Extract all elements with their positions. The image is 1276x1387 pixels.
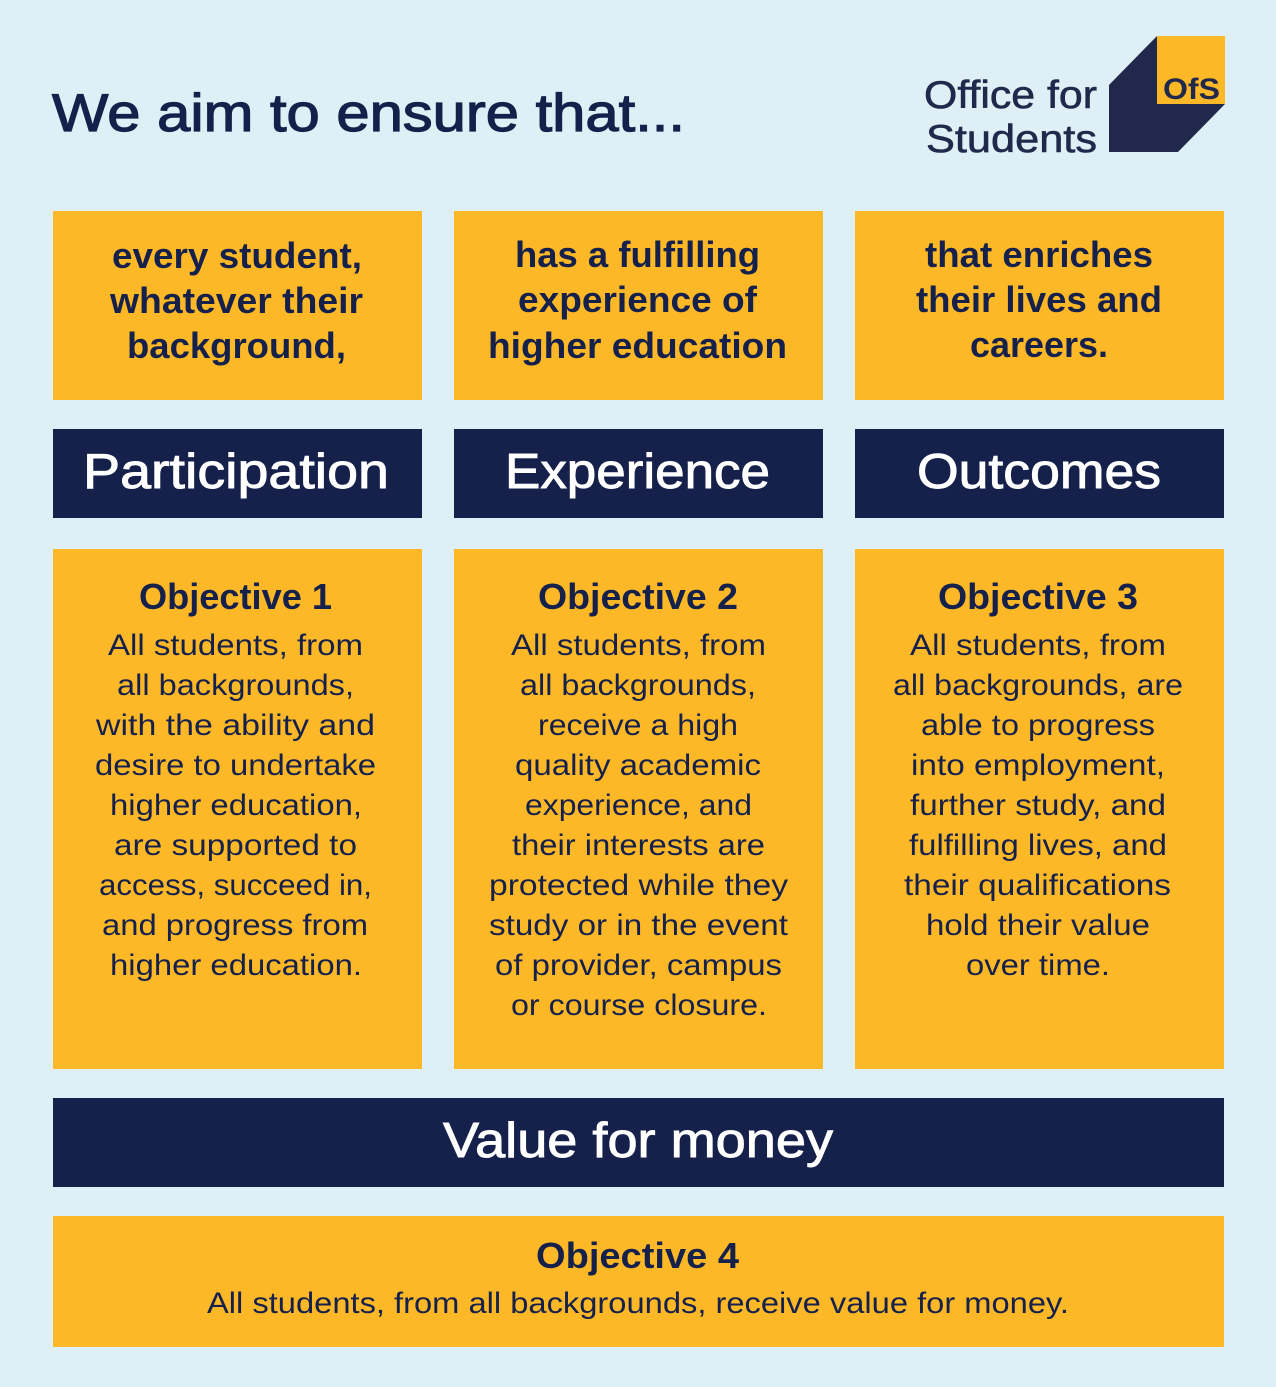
panel: fulfilling experience: experience of [518, 279, 758, 320]
Objective 2 text: all backgrounds, [520, 669, 756, 702]
Objective 3 heading: Objective 3 [938, 576, 1138, 617]
panel: every student: whatever their [109, 280, 363, 321]
panel: every student: background, [127, 325, 346, 366]
Objective 2 heading: Objective 2 [538, 576, 738, 617]
Objective 1 text: All students, from [108, 629, 363, 662]
Objective 2 text: receive a high [538, 709, 738, 742]
heading: Participation [53, 429, 422, 518]
panel: Objective 1 [53, 549, 422, 1069]
Objective 2 text: quality academic [515, 749, 761, 782]
Objective 1 text: desire to undertake [95, 749, 376, 782]
panel: enriches lives: careers. [970, 324, 1108, 365]
Objective 3 text: over time. [966, 949, 1110, 982]
panel: every student: every student, [112, 235, 362, 276]
logo wordmark: Office for [924, 74, 1097, 117]
Objective 1 text [95, 629, 376, 982]
Objective 1 text: higher education, [110, 789, 362, 822]
panel: every student [53, 211, 422, 400]
Objective 2 text: their interests are [512, 829, 765, 862]
Objective 3 text: hold their value [926, 909, 1150, 942]
Objective 3 text: able to progress [921, 709, 1155, 742]
panel: fulfilling experience [454, 211, 823, 400]
heading: Value for money [53, 1098, 1224, 1187]
logo icon: OfS [1163, 73, 1220, 106]
heading: Experience: Experience [505, 445, 770, 499]
panel: Objective 3 [855, 549, 1224, 1069]
Objective 1 text: all backgrounds, [117, 669, 354, 702]
panel: fulfilling experience: has a fulfilling [515, 234, 760, 275]
Objective 2 text: or course closure. [511, 989, 767, 1022]
Objective 2 text: All students, from [511, 629, 766, 662]
Objective 1 text: access, succeed in, [99, 869, 372, 902]
logo: Office for Students [924, 36, 1225, 161]
logo wordmark: Students [926, 118, 1097, 161]
Objective 1 text: with the ability and [95, 709, 375, 742]
Objective 1 heading: Objective 1 [139, 576, 332, 617]
heading: Participation: Participation [83, 445, 389, 499]
Objective 3 text: their qualifications [904, 869, 1171, 902]
Objective 3 text: fulfilling lives, and [909, 829, 1167, 862]
Objective 2 text: study or in the event [489, 909, 788, 942]
Objective 1 text: are supported to [114, 829, 357, 862]
heading: Outcomes: Outcomes [917, 445, 1161, 499]
Objective 3 text: All students, from [910, 629, 1166, 662]
heading: Outcomes [855, 429, 1224, 518]
heading: Experience [454, 429, 823, 518]
logo wordmark [924, 74, 1097, 161]
Objective 4 heading: Objective 4 [536, 1235, 739, 1276]
panel: enriches lives [855, 211, 1224, 400]
panel: enriches lives: their lives and [916, 279, 1162, 320]
Objective 1 text: and progress from [102, 909, 368, 942]
Objective 4 text: All students, from all backgrounds, receive value for money. [207, 1287, 1069, 1320]
Objective 3 text [893, 629, 1183, 982]
Objective 1 text: higher education. [110, 949, 362, 982]
Objective 2 text: of provider, campus [495, 949, 782, 982]
Objective 3 text: all backgrounds, are [893, 669, 1183, 702]
Objective 3 text: further study, and [910, 789, 1166, 822]
title: We aim to ensure that... [52, 84, 685, 143]
Objective 2 text [489, 629, 788, 1022]
Objective 3 text: into employment, [911, 749, 1165, 782]
heading: Value for money: Value for money [443, 1114, 834, 1168]
Objective 2 text: protected while they [489, 869, 788, 902]
panel: Objective 2 [454, 549, 823, 1069]
panel: Objective 4 [53, 1216, 1224, 1347]
panel: enriches lives: that enriches [925, 234, 1153, 275]
panel: fulfilling experience: higher education [488, 325, 787, 366]
logo icon [1109, 36, 1225, 152]
Objective 2 text: experience, and [525, 789, 752, 822]
